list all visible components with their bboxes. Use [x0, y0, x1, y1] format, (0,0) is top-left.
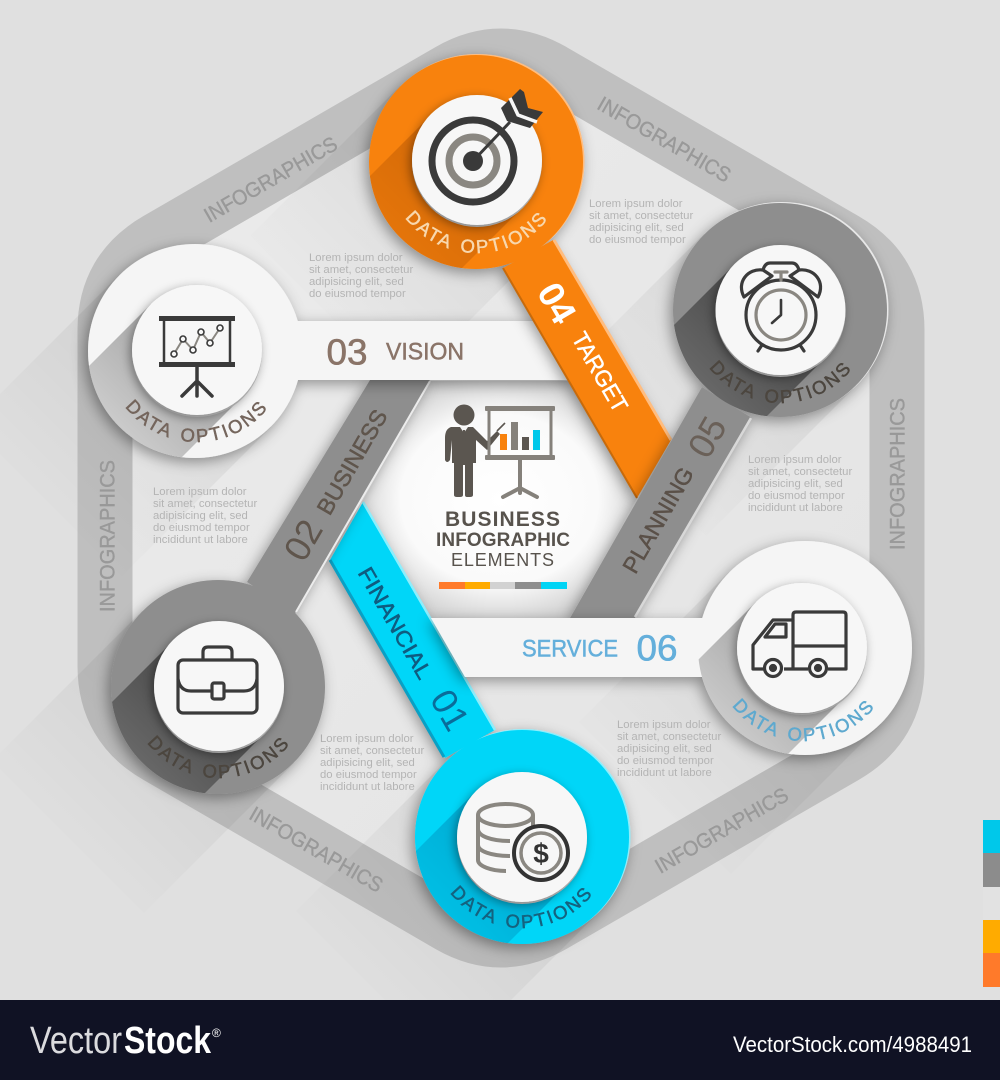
label: service 06: 06 — [636, 628, 678, 668]
footer logo — [30, 1020, 221, 1062]
center colour bar — [439, 582, 567, 589]
lorem text blocks: Lorem ipsum dolor — [309, 252, 403, 264]
label: data options: DATA OPTIONS — [148, 735, 288, 778]
lorem text blocks: do eiusmod tempor — [309, 288, 406, 300]
infographics frame labels: INFOGRAPHICS — [886, 398, 910, 550]
label: 05 planning: PLANNING — [617, 462, 699, 578]
lorem text blocks: adipisicing elit, sed — [748, 478, 843, 490]
footer bar — [0, 1000, 1000, 1080]
label: 03 vision: VISION — [386, 338, 464, 366]
lorem text blocks: do eiusmod tempor — [153, 522, 250, 534]
lorem text blocks: adipisicing elit, sed — [589, 222, 684, 234]
lorem text blocks: do eiusmod tempor — [589, 234, 686, 246]
center title: BUSINESS — [445, 508, 560, 531]
label: 02 business: 02 — [275, 512, 331, 568]
lorem text blocks: do eiusmod tempor — [617, 755, 714, 767]
lorem text blocks: adipisicing elit, sed — [309, 276, 404, 288]
lorem text blocks: adipisicing elit, sed — [153, 510, 248, 522]
step 01 financial: cyan — [322, 502, 636, 956]
label: 01 financial: FINANCIAL — [353, 563, 437, 683]
lorem text blocks: incididunt ut labore — [153, 534, 248, 546]
infographics frame labels: INFOGRAPHICS — [200, 133, 342, 227]
icon: delivery truck — [753, 612, 846, 676]
lorem text blocks: Lorem ipsum dolor — [617, 719, 711, 731]
center title — [436, 508, 570, 570]
long shadows on background — [0, 86, 881, 1063]
icon: target and arrow — [432, 89, 543, 202]
icon: businessman presenting chart — [445, 404, 555, 497]
lorem text blocks: sit amet, consectetur — [589, 210, 693, 222]
lorem text blocks: sit amet, consectetur — [617, 731, 721, 743]
footer logo: Vector — [30, 1020, 122, 1062]
step 02 business: gray left — [100, 380, 431, 806]
label: 05 planning — [617, 409, 735, 578]
infographics frame labels: INFOGRAPHICS — [593, 93, 735, 187]
label: data options: DATA OPTIONS — [710, 360, 850, 404]
label: 03 vision — [326, 332, 464, 372]
lorem text blocks: sit amet, consectetur — [748, 466, 852, 478]
label: 04 target: 04 — [529, 275, 585, 331]
label: 02 business: BUSINESS — [311, 405, 393, 519]
center title: ELEMENTS — [451, 550, 554, 570]
label: data options: DATA OPTIONS — [126, 399, 266, 442]
label: 01 financial — [353, 563, 478, 738]
lorem text blocks — [153, 198, 852, 793]
lorem text blocks: Lorem ipsum dolor — [153, 486, 247, 498]
lorem text blocks: adipisicing elit, sed — [320, 757, 415, 769]
footer logo: ® — [212, 1026, 221, 1040]
step 04 target: orange — [358, 50, 672, 504]
infographics frame labels — [96, 93, 910, 897]
label: 03 vision: 03 — [326, 332, 368, 372]
label: service 06 — [522, 628, 678, 668]
label: data options: DATA OPTIONS — [732, 698, 873, 742]
step 05 planning: gray right — [564, 198, 893, 618]
icon: coins: $ — [533, 838, 549, 869]
footer logo: Stock — [124, 1020, 212, 1062]
label: 02 business — [275, 405, 393, 568]
infographics frame labels: INFOGRAPHICS — [651, 784, 793, 878]
label: data options: DATA OPTIONS — [406, 210, 546, 254]
infographics frame labels: INFOGRAPHICS — [245, 803, 387, 897]
lorem text blocks: Lorem ipsum dolor — [589, 198, 683, 210]
lorem text blocks: Lorem ipsum dolor — [320, 733, 414, 745]
lorem text blocks: incididunt ut labore — [748, 502, 843, 514]
lorem text blocks: sit amet, consectetur — [153, 498, 257, 510]
label: 04 target: TARGET — [567, 327, 633, 417]
lorem text blocks: sit amet, consectetur — [320, 745, 424, 757]
icon: coins — [478, 804, 568, 880]
icon: alarm clock — [741, 263, 821, 351]
label: 04 target — [529, 275, 633, 417]
lorem text blocks: incididunt ut labore — [617, 767, 712, 779]
lorem text blocks: incididunt ut labore — [320, 781, 415, 793]
center title: INFOGRAPHIC — [436, 530, 570, 551]
lorem text blocks: Lorem ipsum dolor — [748, 454, 842, 466]
footer image id: VectorStock.com/4988491 — [733, 1032, 972, 1057]
icon: briefcase — [178, 647, 257, 713]
label: service 06: SERVICE — [522, 636, 618, 662]
hexagon frame — [105, 56, 897, 940]
label: 05 planning: 05 — [679, 409, 735, 465]
colour palette swatches — [983, 820, 1000, 987]
step 03 vision: white left — [77, 240, 570, 470]
infographics frame labels: INFOGRAPHICS — [96, 460, 120, 612]
icon: presentation chart — [159, 316, 235, 396]
lorem text blocks: sit amet, consectetur — [309, 264, 413, 276]
lorem text blocks: do eiusmod tempor — [748, 490, 845, 502]
center hexagon background — [362, 381, 637, 618]
label: data options: DATA OPTIONS — [450, 885, 591, 928]
lorem text blocks: do eiusmod tempor — [320, 769, 417, 781]
label: 01 financial: 01 — [422, 682, 478, 738]
lorem text blocks: adipisicing elit, sed — [617, 743, 712, 755]
step 06 service: white right — [424, 536, 916, 766]
